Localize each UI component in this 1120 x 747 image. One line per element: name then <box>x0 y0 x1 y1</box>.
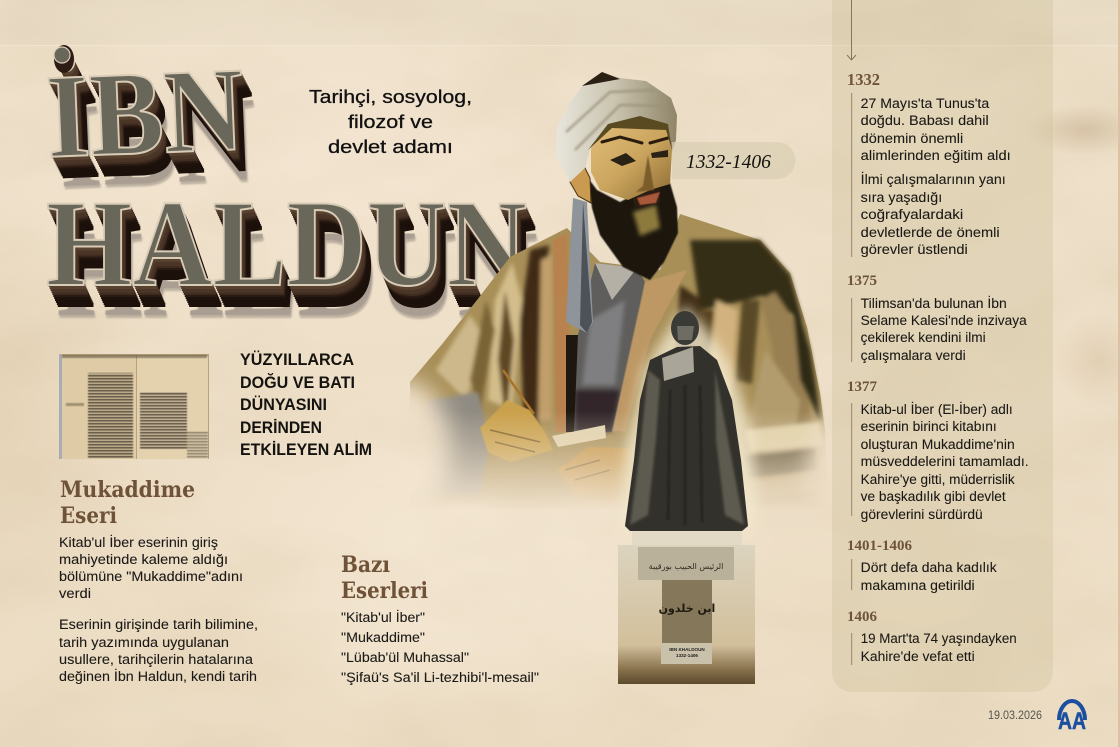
panel: timeline background <box>832 0 1053 692</box>
timeline entry: 1375: 1375 <box>847 273 877 289</box>
title: HALDUN: HALDUN <box>46 175 527 312</box>
timeline entry: 1332: 27 Mayıs'ta Tunus'ta <box>861 96 990 111</box>
robe <box>410 214 830 520</box>
illustration: statue on pedestal: الرئيس الحبيب بورقيبة <box>649 562 723 571</box>
date pill: 1332-1406 <box>686 152 771 173</box>
statue body <box>625 346 748 531</box>
timeline entry: 1332: coğrafyalardaki <box>861 207 963 222</box>
text: Mukaddime description: tarih yazımında uygulanan <box>59 635 229 650</box>
right lapel <box>612 270 687 432</box>
timeline entry: 1377: 1377 <box>847 379 878 395</box>
ear <box>570 166 591 203</box>
text: Mukaddime description: mahiyetinde kaleme aldığı <box>59 552 228 567</box>
text: list of works: "Kitab'ul İber" <box>341 610 425 625</box>
timeline entry: 1332: sıra yaşadığı <box>861 190 942 205</box>
hands <box>480 400 553 462</box>
illustration: statue on pedestal: IBN KHALDOUN <box>669 647 705 652</box>
subheading: YÜZYILLARCA <box>240 350 354 369</box>
illustration: statue on pedestal <box>618 305 758 684</box>
timeline entry: 1377 <box>847 379 1029 522</box>
heading: Bazı Eserleri: Eserleri <box>341 578 428 604</box>
face <box>591 126 672 200</box>
hanging turban cloth <box>566 198 593 333</box>
timeline entry: 1377: müsveddelerini tamamladı. <box>861 454 1029 469</box>
timeline entry: 1401-1406: makamına getirildi <box>861 578 975 593</box>
timeline entry: 1375: çekilerek kendini ilmi <box>861 330 986 345</box>
İ dot of the title <box>54 45 74 73</box>
statue glow <box>620 305 758 530</box>
timeline entry: 1332: dönemin önemli <box>861 131 963 146</box>
timeline arrow <box>847 0 856 60</box>
timeline entry: 1375 <box>847 273 1027 363</box>
text: Mukaddime description: verdi <box>59 586 91 601</box>
timeline entry: 1377: oluşturan Mukaddime'nin <box>861 437 1015 452</box>
timeline entry: 1401-1406: Dört defa daha kadılık <box>861 560 997 575</box>
tagline <box>309 86 472 157</box>
pedestal step <box>632 531 742 546</box>
turban <box>556 72 677 182</box>
date pill <box>672 142 796 179</box>
timeline entry: 1375: çalışmalara verdi <box>861 348 966 363</box>
text: Mukaddime description: bölümüne "Mukaddime"adını <box>59 569 243 584</box>
left lapel <box>553 234 570 432</box>
timeline entry: 1406: Kahire'de vefat etti <box>861 649 975 664</box>
heading: Mukaddime Eseri: Mukaddime <box>60 477 195 503</box>
illustration: statue on pedestal: ابن خلدون <box>659 602 715 615</box>
pen <box>503 370 534 414</box>
timeline entry: 1377: Kahire'ye gitti, müderrislik <box>861 472 1015 487</box>
timeline entry: 1332: devletlerde de önemli <box>861 225 1000 240</box>
timeline entry: 1375: Tilimsan'da bulunan İbn <box>861 296 1007 311</box>
text: list of works: "Lübab'ül Muhassal" <box>341 650 469 665</box>
timeline entry: 1406: 19 Mart'ta 74 yaşındayken <box>861 631 1017 646</box>
vest <box>572 263 645 432</box>
date: 19.03.2026 <box>988 710 1042 722</box>
subheading: ETKİLEYEN ALİM <box>240 441 372 459</box>
pedestal <box>618 545 755 684</box>
timeline entry: 1377: görevlerini sürdürdü <box>861 507 983 522</box>
manuscript image <box>59 354 209 459</box>
beard <box>588 178 678 280</box>
plaque bottom <box>662 580 712 643</box>
timeline entry: 1332: görevler üstlendi <box>861 242 968 257</box>
timeline entry: 1332: 1332 <box>847 70 880 89</box>
heading: Bazı Eserleri <box>341 552 428 604</box>
text: Mukaddime description: Kitab'ul İber eserinin giriş <box>59 535 218 550</box>
heading: Bazı Eserleri: Bazı <box>341 552 390 578</box>
logo: AA <box>1058 701 1086 735</box>
subheading: DERİNDEN <box>240 419 322 437</box>
statue book <box>662 347 694 381</box>
sleeve <box>429 390 488 490</box>
timeline entry: 1377: ve başkadılık gibi devlet <box>861 489 1006 504</box>
timeline entry: 1401-1406 <box>847 538 997 593</box>
timeline entry: 1332 <box>847 70 1011 257</box>
subheading: DÜNYASINI <box>240 395 327 414</box>
text: Mukaddime description: usullere, tarihçilerin hatalarına <box>59 652 254 667</box>
timeline entry: 1406: 1406 <box>847 609 878 625</box>
text: list of works: "Mukaddime" <box>341 630 425 645</box>
timeline entry: 1332: doğdu. Babası dahil <box>861 113 989 128</box>
text: Mukaddime description: değinen İbn Haldun, kendi tarih <box>59 669 257 684</box>
timeline entry: 1332: İlmi çalışmalarının yanı <box>861 172 1006 187</box>
timeline entry: 1332: alimlerinden eğitim aldı <box>861 148 1011 163</box>
text: list of works: "Şifaü's Sa'il Li-tezhibi'l-mesail" <box>341 670 539 685</box>
subheading <box>240 350 372 459</box>
timeline entry: 1377: Kitab-ul İber (El-İber) adlı <box>861 402 1013 417</box>
tagline: devlet adamı <box>328 136 453 157</box>
text: Mukaddime description: Eserinin girişinde tarih bilimine, <box>59 617 258 632</box>
logo: AA: AA <box>1058 708 1086 735</box>
timeline entry: 1377: eserinin birinci kitabını <box>861 419 997 434</box>
tagline: filozof ve <box>348 111 433 132</box>
timeline entry: 1375: Selame Kalesi'nde inzivaya <box>861 313 1027 328</box>
heading: Mukaddime Eseri <box>60 477 195 529</box>
heading: Mukaddime Eseri: Eseri <box>60 503 117 529</box>
text: list of works <box>341 610 539 685</box>
text: Mukaddime description <box>59 535 258 684</box>
statue head <box>671 311 699 345</box>
timeline entry: 1406 <box>847 609 1017 665</box>
plaque top <box>638 547 734 580</box>
title: İBN: İBN <box>44 42 246 183</box>
timeline entry: 1401-1406: 1401-1406 <box>847 538 912 554</box>
tagline: Tarihçi, sosyolog, <box>309 86 472 107</box>
subheading: DOĞU VE BATI <box>240 373 355 392</box>
illustration: statue on pedestal: 1332-1406 <box>676 653 698 658</box>
illustration: portrait of Ibn Khaldun <box>410 72 830 520</box>
